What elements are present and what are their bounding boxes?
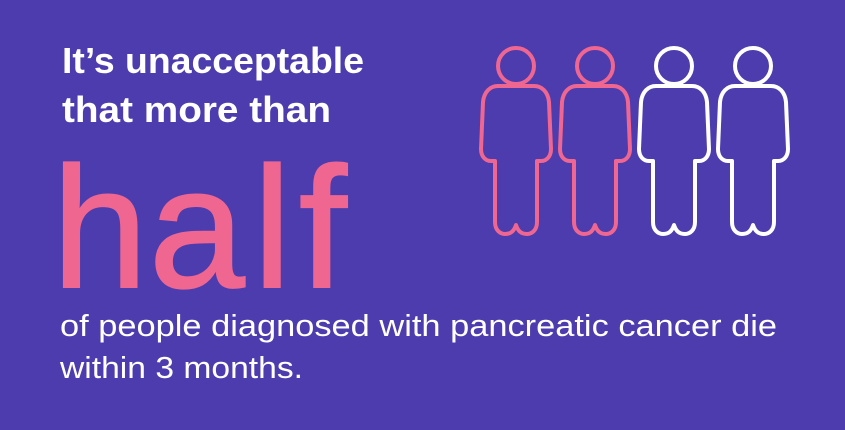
headline: that more than bbox=[62, 89, 331, 130]
headline bbox=[62, 40, 364, 130]
headline: It’s unacceptable bbox=[62, 40, 364, 81]
icon: person pink 2 bbox=[560, 48, 630, 234]
icon: person pink 1 bbox=[481, 48, 551, 234]
icon: person white 1 bbox=[639, 48, 709, 234]
big word: half: half bbox=[52, 132, 348, 324]
body text: of people diagnosed with pancreatic cancer die bbox=[60, 308, 777, 343]
body text bbox=[59, 308, 777, 385]
body text: within 3 months. bbox=[59, 350, 303, 385]
people icons: two of four highlighted bbox=[481, 48, 788, 234]
icon: person white 2 bbox=[718, 48, 788, 234]
